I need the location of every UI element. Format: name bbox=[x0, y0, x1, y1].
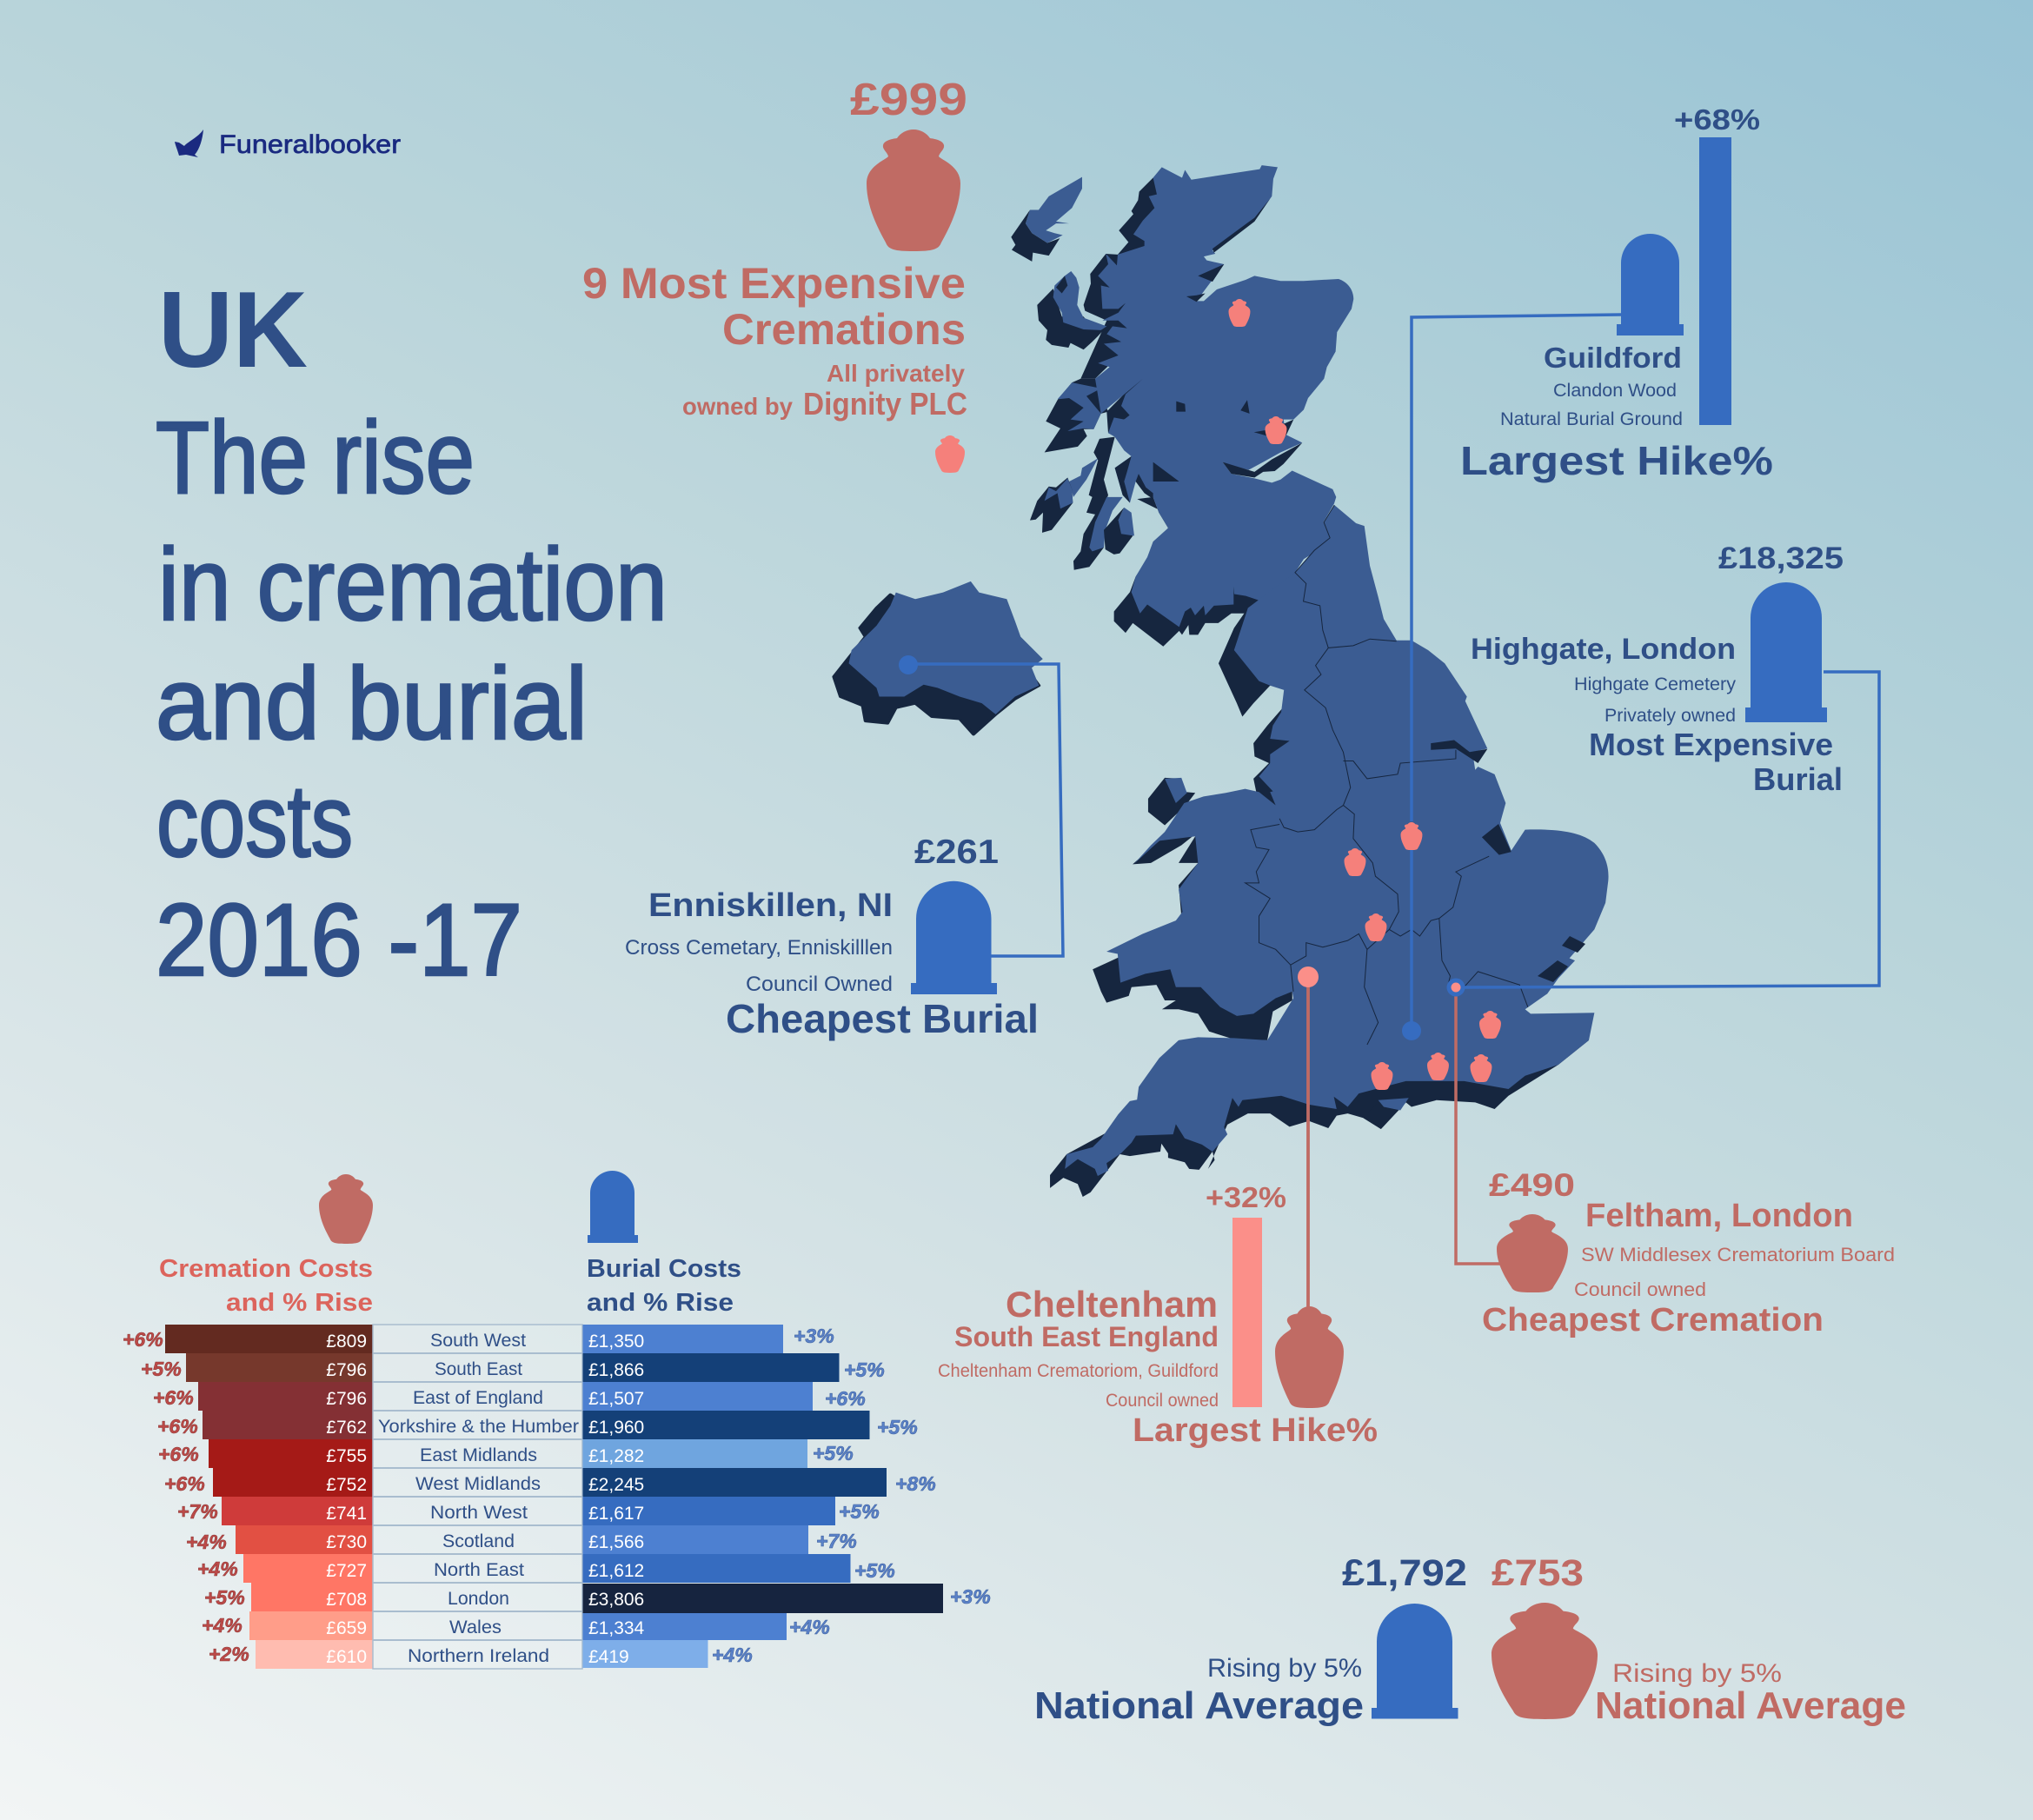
callout: Highgate most expensive burial: £18,325 bbox=[1718, 541, 1844, 575]
region labels: South East bbox=[435, 1359, 522, 1379]
region labels: Yorkshire & the Humber bbox=[378, 1417, 579, 1437]
map of the UK bbox=[834, 165, 1609, 1197]
cremation cost bars: +2% bbox=[209, 1643, 249, 1665]
callout: 9 most expensive cremations: All privately bbox=[827, 360, 965, 387]
cremation cost bars: +5% bbox=[204, 1586, 245, 1609]
map: Suffolk and Thames estuaries bbox=[1538, 936, 1585, 982]
region labels: West Midlands bbox=[415, 1474, 541, 1494]
map: Scotland and islands bbox=[1011, 165, 1353, 647]
cremation cost bars: £708 bbox=[326, 1590, 367, 1610]
burial cost bars: +5% bbox=[854, 1559, 895, 1582]
callout: Guildford largest hike in burial costs: Guildford bbox=[1544, 342, 1682, 374]
heading: burial costs: and % Rise bbox=[587, 1289, 734, 1317]
burial cost bars: +5% bbox=[813, 1442, 854, 1465]
cremation cost bars: £796 bbox=[326, 1389, 367, 1409]
burial cost bars bbox=[582, 1325, 991, 1668]
cremation cost bars: £610 bbox=[326, 1647, 367, 1667]
burial cost bars: £419 bbox=[588, 1647, 629, 1667]
cremation cost bars: £727 bbox=[326, 1561, 367, 1581]
cremation cost bars: +6% bbox=[153, 1386, 194, 1409]
heading: burial costs bbox=[587, 1255, 741, 1317]
region labels: South West bbox=[430, 1331, 526, 1351]
callout: Guildford largest hike in burial costs: +68% bbox=[1674, 103, 1760, 136]
map: England and Wales bbox=[1050, 505, 1609, 1197]
callout: 9 most expensive cremations: 9 Most Expensive bbox=[582, 259, 966, 308]
national average: burial: National Average bbox=[1034, 1684, 1364, 1727]
callout: Enniskillen cheapest burial: Council Owned bbox=[746, 973, 893, 996]
callout: Cheltenham largest hike in cremation costs: Cheltenham bbox=[1006, 1284, 1218, 1325]
region labels: Northern Ireland bbox=[408, 1646, 549, 1666]
burial cost bars: +5% bbox=[839, 1500, 880, 1523]
callout: 9 most expensive cremations: Dignity PLC bbox=[803, 386, 967, 422]
title: The rise bbox=[156, 401, 475, 515]
callout: Enniskillen cheapest burial: Cross Cemetary, Enniskilllen bbox=[625, 936, 893, 960]
callout: Cheltenham largest hike in cremation costs: Cheltenham Crematoriom, Guildford bbox=[938, 1361, 1219, 1381]
icon: burial headstone bbox=[588, 1171, 638, 1243]
region labels: East Midlands bbox=[420, 1445, 537, 1465]
cremation cost bars bbox=[123, 1325, 373, 1669]
burial cost bars: +5% bbox=[844, 1358, 885, 1381]
burial cost bars: £1,282 bbox=[588, 1446, 644, 1466]
callout: Enniskillen cheapest burial: Enniskillen, NI bbox=[648, 887, 893, 924]
region labels bbox=[373, 1325, 582, 1669]
callout: Highgate most expensive burial: Highgate Cemetery bbox=[1574, 674, 1737, 694]
national average: burial: Rising by 5% bbox=[1207, 1654, 1362, 1683]
burial cost bars: +8% bbox=[895, 1472, 936, 1495]
callout: Feltham cheapest cremation: Council owned bbox=[1574, 1279, 1706, 1300]
callout: Cheltenham largest hike in cremation costs: +32% bbox=[1206, 1181, 1286, 1213]
callout: Cheltenham largest hike in cremation costs: Largest Hike% bbox=[1133, 1412, 1378, 1449]
callout: Feltham cheapest cremation: Cheapest Cremation bbox=[1482, 1302, 1824, 1338]
callout: 9 most expensive cremations bbox=[582, 75, 967, 473]
burial cost bars: £1,960 bbox=[588, 1418, 644, 1438]
region labels: Wales bbox=[449, 1617, 502, 1637]
title: UK bbox=[158, 270, 308, 390]
callout: Enniskillen cheapest burial bbox=[625, 655, 1063, 1041]
burial cost bars: £1,612 bbox=[588, 1561, 644, 1581]
cremation cost bars: +7% bbox=[177, 1500, 218, 1523]
callout: Feltham cheapest cremation bbox=[1446, 979, 1895, 1338]
heading: cremation costs: Cremation Costs bbox=[159, 1255, 373, 1283]
burial cost bars: +3% bbox=[950, 1585, 991, 1608]
cremation cost bars: +4% bbox=[202, 1614, 242, 1637]
cremation cost bars: £796 bbox=[326, 1360, 367, 1380]
callout: Guildford largest hike in burial costs: Clandon Wood bbox=[1553, 381, 1677, 401]
cremation cost bars: £755 bbox=[326, 1446, 367, 1466]
callout: Feltham cheapest cremation: Feltham, London bbox=[1585, 1198, 1853, 1234]
region labels: North West bbox=[430, 1503, 528, 1523]
burial cost bars: +7% bbox=[816, 1530, 857, 1552]
burial cost bars: +6% bbox=[825, 1387, 866, 1410]
burial cost bars: £1,350 bbox=[588, 1332, 644, 1352]
region labels: North East bbox=[434, 1560, 524, 1580]
icon: cremation urn bbox=[319, 1174, 373, 1244]
cremation cost bars: +4% bbox=[197, 1558, 238, 1580]
logo: Funeralbooker: Funeralbooker bbox=[219, 130, 401, 159]
cremation cost bars: +6% bbox=[158, 1443, 199, 1465]
cremation cost bars: £809 bbox=[326, 1332, 367, 1352]
cremation cost bars: +6% bbox=[164, 1472, 205, 1495]
cremation cost bars: £752 bbox=[326, 1475, 367, 1495]
title: 2016 -17 bbox=[156, 883, 522, 998]
callout: 9 most expensive cremations: owned by bbox=[682, 393, 793, 420]
cremation cost bars: £741 bbox=[326, 1504, 367, 1524]
burial cost bars: £2,245 bbox=[588, 1475, 644, 1495]
title: in cremation bbox=[158, 528, 668, 642]
burial cost bars: £1,866 bbox=[588, 1360, 644, 1380]
title: costs bbox=[156, 764, 353, 879]
heading: burial costs: Burial Costs bbox=[587, 1255, 741, 1283]
callout: Highgate most expensive burial: Burial bbox=[1753, 761, 1843, 797]
national average: burial: £1,792 bbox=[1342, 1552, 1467, 1594]
map pins: crematoria urns bbox=[1229, 299, 1501, 1090]
burial cost bars: £1,507 bbox=[588, 1389, 644, 1409]
burial cost bars: £1,334 bbox=[588, 1618, 645, 1638]
callout: Feltham cheapest cremation: £490 bbox=[1489, 1167, 1575, 1203]
callout: 9 most expensive cremations: Cremations bbox=[722, 305, 966, 354]
callout: Highgate most expensive burial bbox=[1465, 541, 1879, 987]
burial cost bars: +3% bbox=[794, 1325, 834, 1347]
callout: Highgate most expensive burial: Highgate, London bbox=[1471, 633, 1736, 666]
callout: Cheltenham largest hike in cremation costs: South East England bbox=[954, 1321, 1219, 1352]
cremation cost bars: £762 bbox=[326, 1418, 367, 1438]
burial cost bars: +4% bbox=[789, 1616, 830, 1638]
title bbox=[156, 270, 668, 998]
callout: Highgate most expensive burial: Privately owned bbox=[1604, 706, 1736, 726]
callout: Cheltenham largest hike in cremation costs: Council owned bbox=[1106, 1391, 1219, 1411]
burial cost bars: £1,617 bbox=[588, 1504, 644, 1524]
callout: Guildford largest hike in burial costs: Natural Burial Ground bbox=[1500, 409, 1683, 429]
map: Northern Ireland bbox=[834, 581, 1043, 734]
cremation cost bars: +4% bbox=[186, 1531, 227, 1553]
national average: cremation bbox=[1492, 1552, 1906, 1727]
region labels: Scotland bbox=[442, 1531, 515, 1551]
callout: Guildford largest hike in burial costs: Largest Hike% bbox=[1460, 438, 1773, 483]
title: and burial bbox=[156, 647, 588, 761]
cremation cost bars: +6% bbox=[157, 1415, 198, 1438]
callout: Enniskillen cheapest burial: Cheapest Burial bbox=[726, 996, 1039, 1041]
callout: 9 most expensive cremations: £999 bbox=[850, 75, 967, 125]
heading: cremation costs bbox=[159, 1255, 373, 1317]
callout: Highgate most expensive burial: Most Expensive bbox=[1589, 727, 1833, 762]
chart: regional cremation and burial costs bbox=[123, 1171, 991, 1669]
heading: cremation costs: and % Rise bbox=[226, 1289, 373, 1317]
burial cost bars: +5% bbox=[877, 1416, 918, 1438]
callout: Feltham cheapest cremation: SW Middlesex Crematorium Board bbox=[1581, 1244, 1895, 1265]
callout: Guildford largest hike in burial costs bbox=[1402, 103, 1773, 1040]
callout: Cheltenham largest hike in cremation costs bbox=[938, 966, 1378, 1449]
cremation cost bars: +6% bbox=[123, 1328, 163, 1351]
national average: cremation: Rising by 5% bbox=[1612, 1659, 1782, 1688]
burial cost bars: +4% bbox=[712, 1644, 753, 1666]
cremation cost bars: £730 bbox=[326, 1532, 367, 1552]
national average: cremation: National Average bbox=[1595, 1684, 1906, 1727]
region labels: East of England bbox=[413, 1388, 543, 1408]
national average: cremation: £753 bbox=[1492, 1552, 1584, 1594]
cremation cost bars: £659 bbox=[326, 1618, 367, 1638]
callout: Enniskillen cheapest burial: £261 bbox=[914, 834, 999, 871]
cremation cost bars: +5% bbox=[141, 1358, 182, 1380]
burial cost bars: £3,806 bbox=[588, 1590, 644, 1610]
burial cost bars: £1,566 bbox=[588, 1532, 644, 1552]
national average: burial bbox=[1034, 1552, 1467, 1727]
region labels: London bbox=[448, 1589, 509, 1609]
